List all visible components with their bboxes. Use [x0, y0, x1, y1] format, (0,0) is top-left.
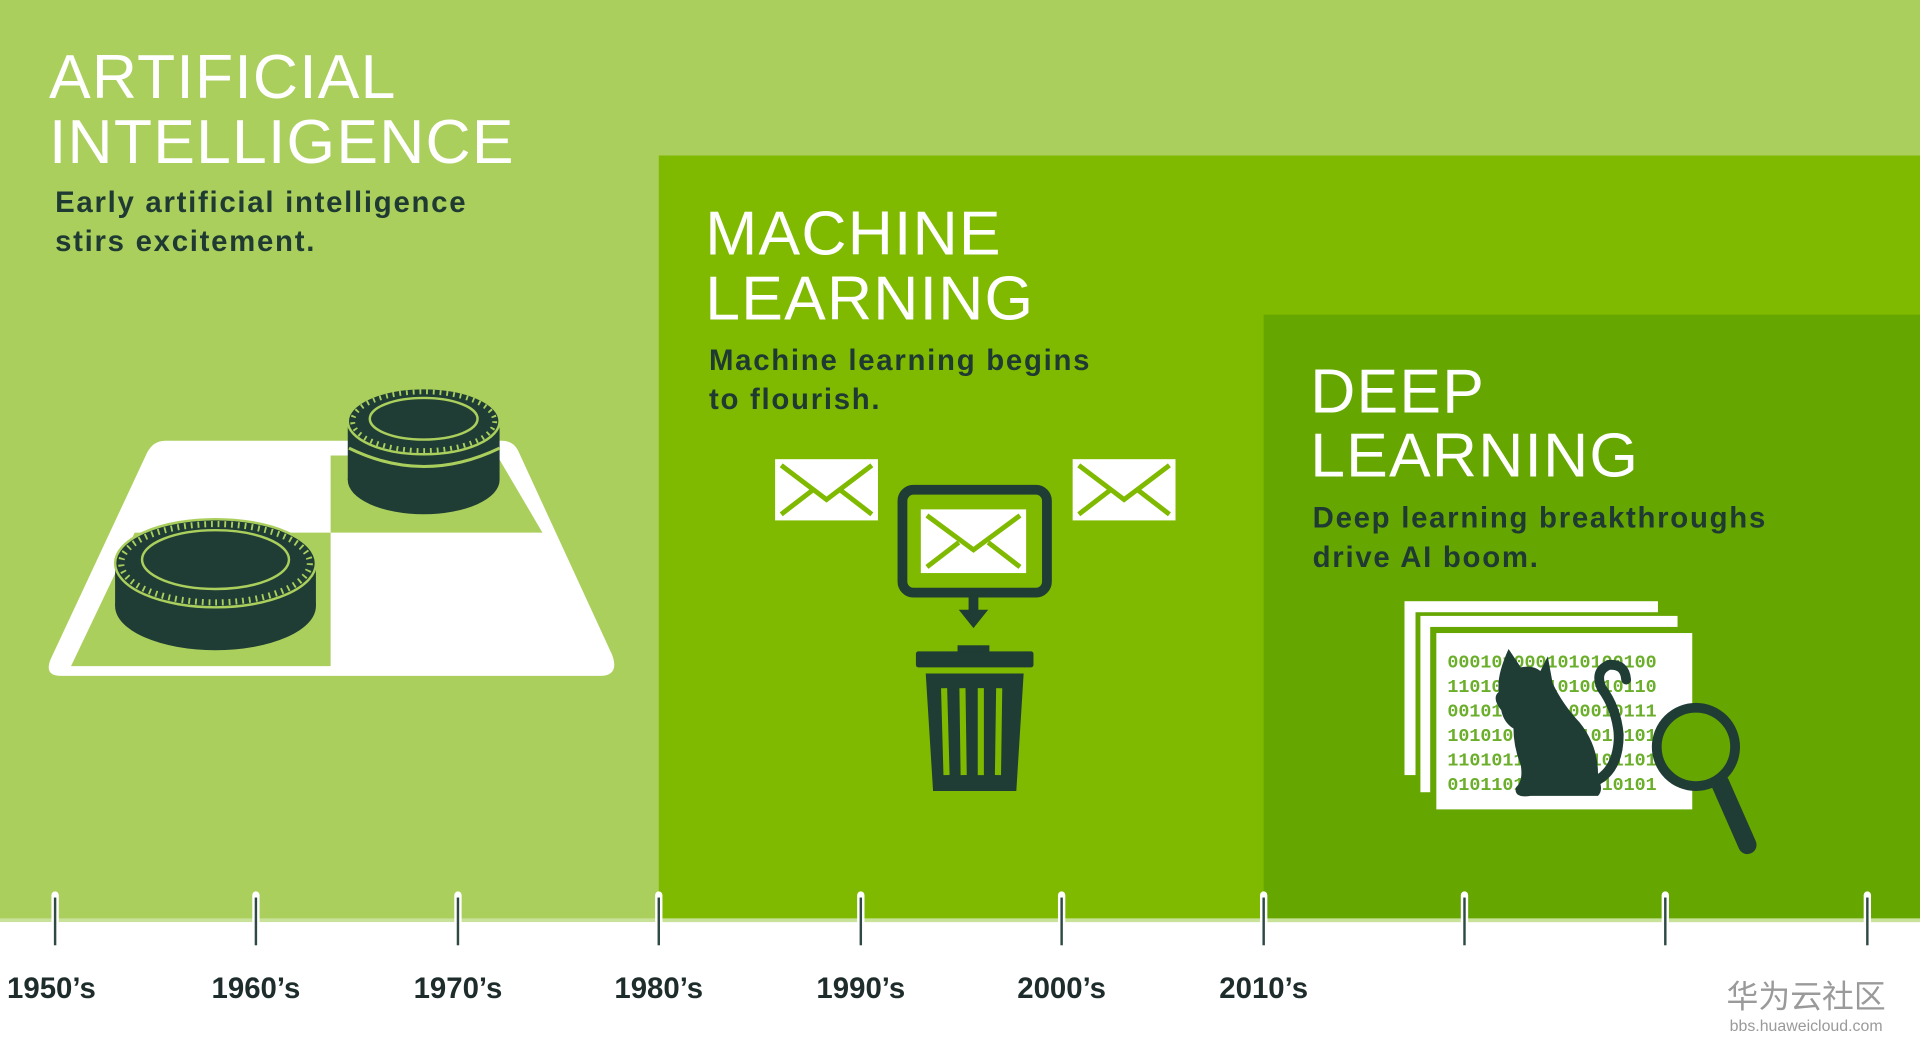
watermark: bbs.huaweicloud.com [1730, 1018, 1883, 1035]
icon: checkerboard with pieces [49, 388, 614, 676]
checker piece single [115, 519, 316, 650]
title: deep learning: LEARNING [1310, 420, 1639, 490]
text: DL description: drive AI boom. [1313, 541, 1540, 574]
title: artificial intelligence [49, 42, 515, 177]
panel: deep learning [1264, 315, 1920, 922]
panel: machine learning [659, 156, 1920, 922]
arrow: down to trash [959, 595, 988, 628]
decade labels: 1950’s [7, 972, 96, 1005]
icon: magnifier [1657, 708, 1747, 845]
binary text: 1101011010100101101 [1447, 750, 1657, 771]
title: machine learning [705, 199, 1034, 334]
title: artificial intelligence: ARTIFICIAL [49, 42, 397, 112]
title: deep learning [1310, 357, 1639, 490]
icon: trash can [916, 645, 1033, 791]
watermark: 华为云社区 [1727, 979, 1886, 1015]
text: AI description [55, 186, 467, 258]
title: machine learning: MACHINE [705, 199, 1002, 269]
decade labels: 2010’s [1219, 972, 1308, 1005]
decade labels: 1970’s [414, 972, 502, 1005]
binary text: 0101101001010010101 [1447, 775, 1657, 796]
binary text: 0010110101100010111 [1447, 701, 1657, 722]
decade labels: 1960’s [212, 972, 300, 1005]
text: ML description [709, 344, 1091, 416]
text: ML description: to flourish. [709, 383, 881, 416]
icon: left envelope [775, 459, 878, 520]
icon: inbox with envelope [902, 490, 1047, 593]
title: artificial intelligence: INTELLIGENCE [49, 107, 515, 177]
binary text [1447, 652, 1657, 796]
decade labels: 1980’s [614, 972, 703, 1005]
decade labels [7, 972, 1308, 1005]
text: DL description [1313, 502, 1767, 574]
binary text: 1101001011010010110 [1447, 677, 1657, 698]
decade labels: 2000’s [1017, 972, 1106, 1005]
icon: data sheets with cat and magnifier [1404, 601, 1747, 845]
text: DL description: Deep learning breakthroughs [1313, 502, 1767, 535]
title: deep learning: DEEP [1310, 357, 1485, 427]
text: AI description: Early artificial intelligence [55, 186, 467, 219]
watermark [1727, 979, 1886, 1035]
ticks [51, 891, 1871, 945]
timeline [0, 891, 1920, 1005]
text: ML description: Machine learning begins [709, 344, 1091, 377]
checker piece stack [348, 388, 500, 514]
title: machine learning: LEARNING [705, 264, 1034, 334]
icon: right envelope [1073, 459, 1176, 520]
icon: cat silhouette [1496, 649, 1601, 796]
binary text: 1010101101001010101 [1447, 726, 1657, 747]
text: AI description: stirs excitement. [55, 225, 316, 258]
binary text: 0001010001010100100 [1447, 652, 1657, 673]
decade labels: 1990’s [816, 972, 905, 1005]
